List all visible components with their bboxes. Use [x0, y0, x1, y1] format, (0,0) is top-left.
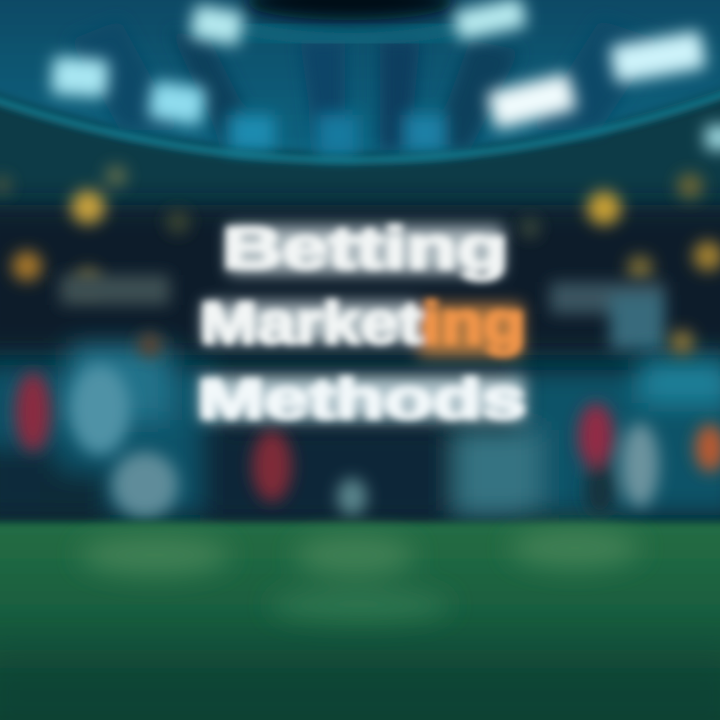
text glow blocks — [200, 226, 525, 420]
heading line 1: Betting — [222, 216, 508, 281]
football field — [0, 522, 720, 720]
title text — [198, 216, 526, 430]
heading line 3: Methods — [198, 367, 526, 430]
light panels — [51, 0, 720, 150]
figures — [15, 330, 720, 518]
vignette — [0, 650, 720, 720]
stadium roof with lights — [0, 0, 720, 160]
upper stand — [0, 85, 720, 360]
heading line 2: Market ing — [200, 291, 525, 356]
ceiling dark centre — [245, 0, 455, 20]
golden stand lights — [0, 165, 720, 293]
field highlights — [80, 528, 640, 621]
crowd band — [0, 330, 720, 525]
side banners — [60, 275, 665, 350]
